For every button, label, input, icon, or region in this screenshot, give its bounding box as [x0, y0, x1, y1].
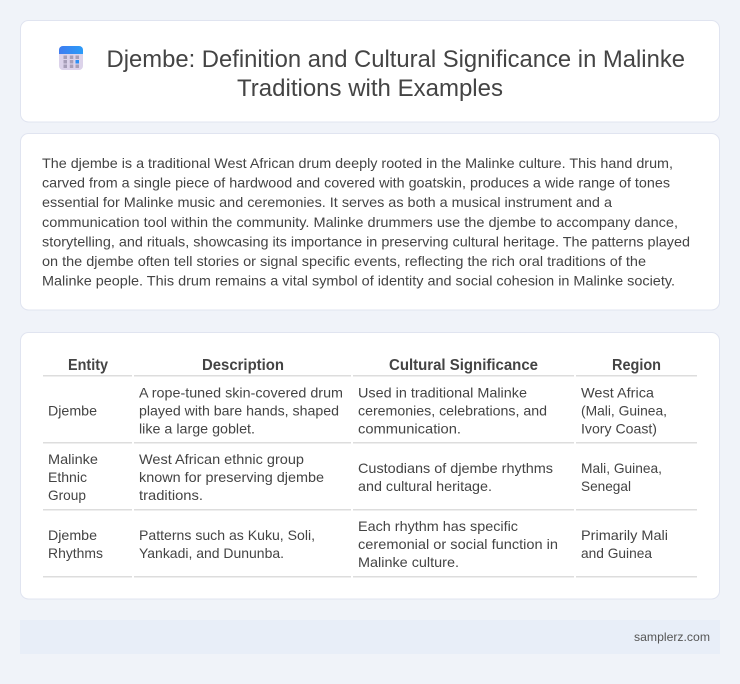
table row: Djembe — [43, 384, 697, 444]
text block: djembe description: communication tool within the community. Malinke drummers use the djembe to accompany dance, — [42, 214, 678, 230]
title: Traditions with Examples — [237, 75, 503, 102]
table row: Djembe: West Africa — [581, 384, 654, 400]
text block: djembe description: essential for Malinke music and ceremonies. It serves as both a musical instrument and a — [42, 194, 612, 210]
table row: Malinke Ethnic Group — [43, 451, 697, 510]
text block: djembe description — [42, 155, 690, 289]
table row: Djembe Rhythms: Yankadi, and Dununba. — [139, 545, 284, 561]
panel: title card — [20, 20, 720, 122]
table row: Djembe: communication. — [358, 420, 461, 436]
table: header row: Cultural Significance — [389, 357, 538, 374]
table row: Djembe Rhythms: Patterns such as Kuku, Soli, — [139, 527, 315, 543]
table row: Djembe Rhythms: Djembe — [48, 527, 97, 543]
footer — [20, 620, 720, 654]
table row: Malinke Ethnic Group: West African ethnic group — [139, 451, 304, 467]
table row: Malinke Ethnic Group: Mali, Guinea, — [581, 460, 662, 476]
text block: djembe description: on the djembe often tell stories or signal specific events, reflecting the rich oral traditions of the — [42, 253, 646, 269]
table row: Djembe Rhythms: Rhythms — [48, 545, 103, 561]
table row: Djembe Rhythms: Primarily Mali — [581, 527, 668, 543]
text block: djembe description: carved from a single piece of hardwood and covered with goatskin, produces a wide range of tones — [42, 175, 670, 191]
table row: Djembe: like a large goblet. — [139, 420, 255, 436]
table row: Djembe Rhythms — [43, 518, 697, 578]
text block: djembe description: The djembe is a traditional West African drum deeply rooted in the Malinke culture. This hand drum, — [42, 155, 673, 171]
table row: Malinke Ethnic Group: Ethnic — [48, 469, 87, 485]
panel: table card — [20, 332, 720, 599]
table row: Malinke Ethnic Group: and cultural heritage. — [358, 478, 492, 494]
table row: Djembe Rhythms: Malinke culture. — [358, 554, 459, 570]
table row: Malinke Ethnic Group: Group — [48, 487, 86, 503]
title — [106, 46, 685, 102]
table row: Djembe: played with bare hands, shaped — [139, 402, 339, 418]
footer: samplerz.com — [634, 630, 710, 644]
table row: Djembe: (Mali, Guinea, — [581, 402, 667, 418]
text block: djembe description: storytelling, and rituals, showcasing its importance in preserving cultural heritage. The patterns played — [42, 233, 690, 249]
table row: Djembe Rhythms: and Guinea — [581, 545, 652, 561]
table row: Djembe: Used in traditional Malinke — [358, 384, 527, 400]
text block: djembe description: Malinke people. This drum remains a vital symbol of identity and social cohesion in Malinke society. — [42, 273, 675, 289]
table row: Malinke Ethnic Group: traditions. — [139, 487, 203, 503]
table row: Malinke Ethnic Group: known for preserving djembe — [139, 469, 324, 485]
table row: Malinke Ethnic Group: Custodians of djembe rhythms — [358, 460, 553, 476]
table: header row — [43, 357, 697, 376]
table row: Djembe Rhythms: Each rhythm has specific — [358, 518, 518, 534]
panel: introduction — [20, 134, 720, 310]
table row: Malinke Ethnic Group: Malinke — [48, 451, 98, 467]
table row: Djembe: ceremonies, celebrations, and — [358, 402, 547, 418]
table row: Djembe: A rope-tuned skin-covered drum — [139, 384, 343, 400]
table row: Djembe: Ivory Coast) — [581, 420, 657, 436]
icon: calendar — [59, 46, 83, 70]
title: Djembe: Definition and Cultural Significance in Malinke — [106, 46, 685, 73]
table: header row: Description — [202, 357, 284, 374]
table row: Djembe: Djembe — [48, 402, 97, 418]
table: header row: Entity — [68, 357, 108, 374]
table: header row: Region — [612, 357, 661, 374]
table row: Malinke Ethnic Group: Senegal — [581, 478, 631, 494]
table row: Djembe Rhythms: ceremonial or social function in — [358, 536, 558, 552]
